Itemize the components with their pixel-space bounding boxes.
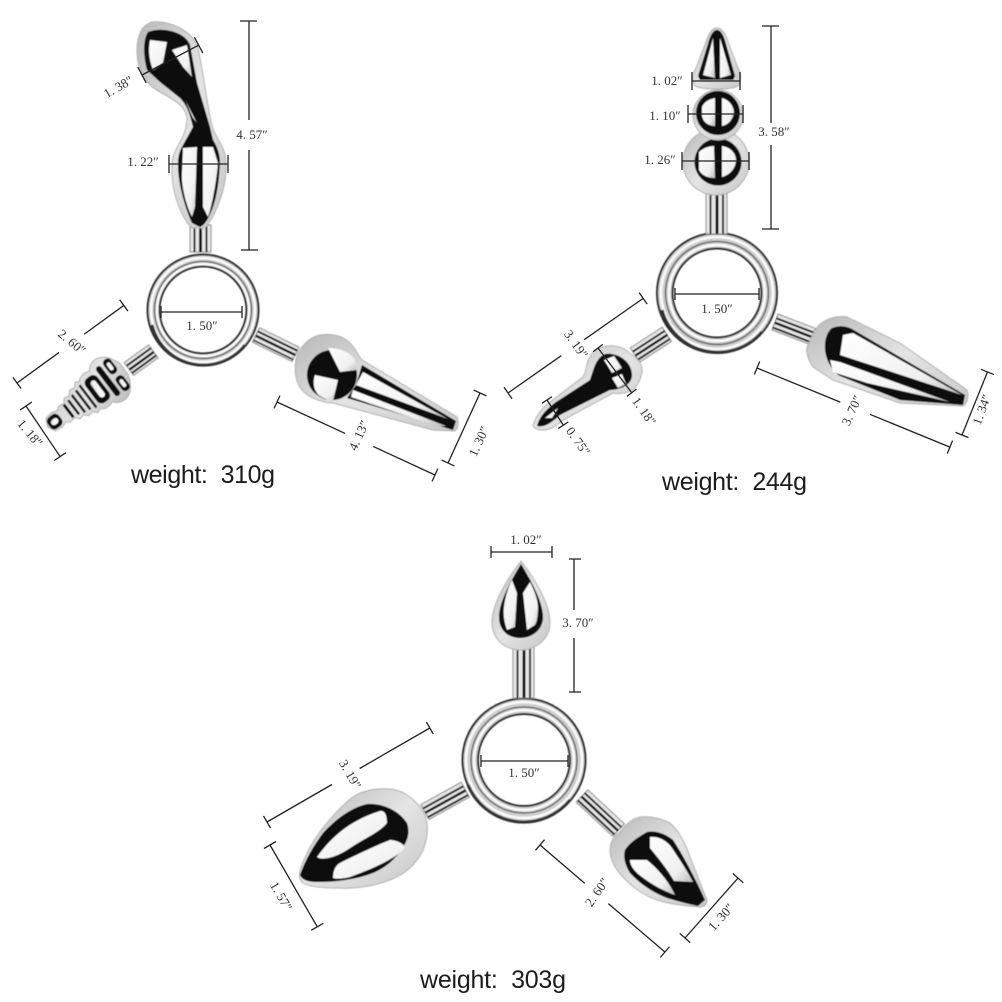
dimension: 3.70: 3. 70″ <box>838 393 865 428</box>
product set 1 <box>13 21 492 489</box>
dimension: 3.19 <box>504 293 647 399</box>
ring 1 <box>148 254 258 366</box>
dimension: inner ring 1.50 <box>481 755 568 780</box>
lower right piece <box>252 328 458 431</box>
dimension: 1.38: 1. 38″ <box>101 72 136 101</box>
dimension: inner ring 1.50: 1. 50″ <box>701 301 733 316</box>
dimension: inner ring 1.50 <box>675 288 759 316</box>
lower left large piece <box>299 782 469 888</box>
dimension: 3.19: 3. 19″ <box>561 327 591 361</box>
dimension: 1.02 <box>651 72 740 90</box>
dimension: 1.18: 1. 18″ <box>14 416 46 450</box>
product set 2 <box>504 26 994 496</box>
dimension: 1.18: 1. 18″ <box>629 394 659 428</box>
dimension: 2.60 <box>535 840 669 957</box>
dimension: 1.02 <box>491 532 552 558</box>
dimension: inner ring 1.50: 1. 50″ <box>508 765 540 780</box>
dimension: 1.30 <box>442 390 492 466</box>
dimension: 4.57 <box>236 21 268 250</box>
dimension: 3.58: 3. 58″ <box>758 124 790 139</box>
dimension: 1.22: 1. 22″ <box>127 154 159 169</box>
dimension: 1.02: 1. 02″ <box>510 532 542 547</box>
weight 244g: weight: 244g <box>661 468 807 496</box>
lower right piece <box>576 790 707 907</box>
dimension: 1.10 <box>649 105 743 123</box>
lower left ribbed piece <box>32 345 158 447</box>
dimension: 1.57: 1. 57″ <box>267 879 296 914</box>
dimension: 2.60 <box>13 300 128 389</box>
dimension: 3.58 <box>758 26 790 229</box>
dimension: 3.70 <box>754 362 953 454</box>
dimension: 1.57 <box>264 842 323 930</box>
dimension: 1.30: 1. 30″ <box>705 900 737 934</box>
product set 3 <box>264 532 743 994</box>
dimension: 1.34: 1. 34″ <box>969 392 994 427</box>
dimension: 1.10: 1. 10″ <box>649 108 681 123</box>
dimension: 1.38 <box>101 37 203 101</box>
upper beaded piece <box>683 28 749 234</box>
dimension: 0.75 <box>542 397 593 458</box>
weight 303g: weight: 303g <box>419 966 566 994</box>
dimension: 3.70: 3. 70″ <box>562 615 594 630</box>
dimension: 1.18 <box>14 402 66 460</box>
dimension: 1.30: 1. 30″ <box>465 424 492 459</box>
ring 2 <box>657 233 777 353</box>
dimension: inner ring 1.50: 1. 50″ <box>186 318 218 333</box>
dimension: 3.19 <box>264 722 433 828</box>
dimension: 1.34 <box>956 369 994 438</box>
dimension: 1.30 <box>680 873 743 943</box>
dimension: 4.13 <box>274 396 438 481</box>
dimension: 4.13: 4. 13″ <box>345 418 372 453</box>
dimension: 1.26: 1. 26″ <box>644 152 676 167</box>
dimension: 3.70 <box>562 559 594 692</box>
dimension: 0.75: 0. 75″ <box>563 424 593 458</box>
dimension: 1.18 <box>593 344 659 428</box>
lower right cone piece <box>772 314 968 406</box>
ring 3 <box>462 698 586 822</box>
dimension: 1.02: 1. 02″ <box>651 73 683 88</box>
upper curved piece <box>137 22 226 252</box>
dimension: 2.60: 2. 60″ <box>55 326 89 358</box>
upper teardrop piece <box>492 561 550 698</box>
weight 310g: weight: 310g <box>130 461 275 489</box>
dimension: 3.19: 3. 19″ <box>336 757 365 792</box>
dimension: 4.57: 4. 57″ <box>236 127 268 142</box>
dimension: inner ring 1.50 <box>161 306 242 333</box>
lower left piece <box>533 327 671 430</box>
dimension: 1.22 <box>127 154 228 173</box>
dimension: 2.60: 2. 60″ <box>582 875 612 909</box>
dimension: 1.26 <box>644 152 749 170</box>
